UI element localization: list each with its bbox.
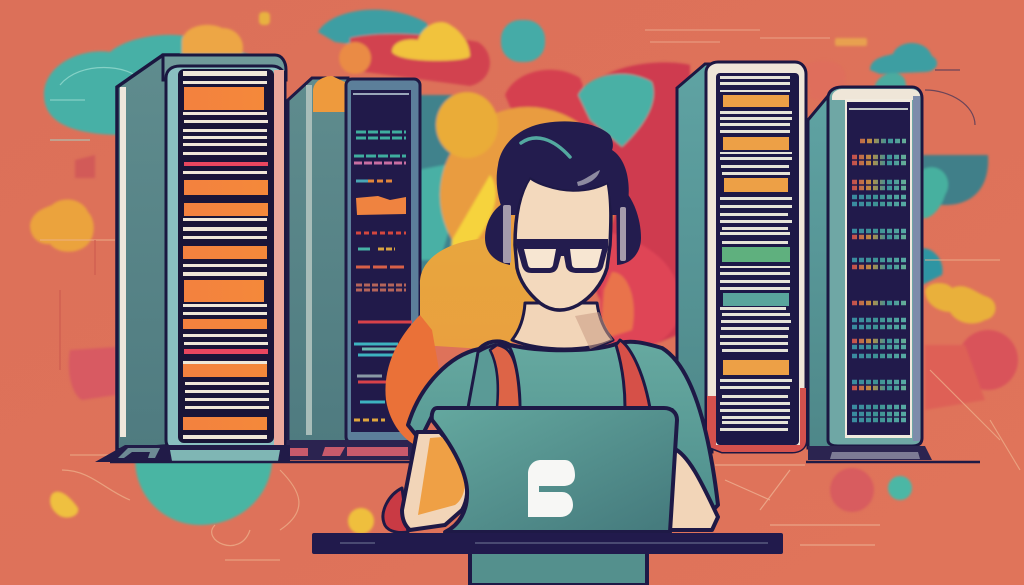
rack 2 status lines bbox=[354, 132, 412, 420]
headphone right pad bbox=[620, 207, 626, 261]
blob: teal wedge bbox=[418, 160, 470, 260]
neck shadow bbox=[575, 312, 613, 349]
rack 2 screen top line bbox=[353, 93, 409, 95]
server rack 2 (left inner) bbox=[285, 76, 420, 460]
rack 1 base highlight bbox=[170, 450, 280, 461]
rack 4 base highlight bbox=[830, 452, 920, 459]
gear: red right bbox=[958, 330, 1018, 390]
blob: yellow orange top left bbox=[182, 25, 243, 54]
blob: teal inside cup bbox=[922, 167, 948, 218]
rack 4 dark display bbox=[847, 102, 910, 435]
rack 4 cream top bbox=[832, 89, 920, 100]
rack 2 base bbox=[285, 440, 420, 460]
face bbox=[515, 177, 611, 310]
blob: amber lower left of head bbox=[420, 238, 540, 350]
blob: orange teardrop bbox=[385, 315, 440, 445]
blob: tag top right bbox=[835, 38, 867, 46]
rack 4 front frame bbox=[828, 87, 922, 446]
rack 1 orange drive bays bbox=[183, 87, 268, 430]
rack 1 white edge bbox=[120, 87, 126, 437]
drop: yellow bottom left bbox=[50, 492, 78, 518]
circle: red bottom right bbox=[830, 468, 874, 512]
left lens bbox=[524, 249, 556, 268]
rack 4 side panel bbox=[808, 96, 832, 448]
right lens bbox=[570, 249, 602, 268]
cloud: yellow bbox=[392, 22, 470, 61]
blob: teal under cloud bbox=[875, 73, 908, 95]
blob: red top middle bbox=[505, 70, 600, 130]
headphones right cup bbox=[616, 182, 641, 265]
rack 1 side panel bbox=[117, 55, 178, 450]
blob: orange behind head bbox=[440, 107, 616, 283]
circle: orange top bbox=[339, 42, 371, 74]
rack 4 right strip bbox=[913, 96, 920, 441]
hair bbox=[497, 121, 629, 215]
rack 4 screen top line bbox=[849, 108, 908, 110]
left strap outline bbox=[468, 345, 520, 408]
blob: pink rectangle left bbox=[69, 347, 116, 400]
cup: slate right bbox=[922, 155, 988, 205]
rack 2 front frame bbox=[346, 79, 420, 443]
rack 3 front frame bbox=[706, 62, 806, 452]
blob: red lower right bbox=[925, 345, 985, 410]
rack 1 cream stripes bbox=[183, 71, 269, 439]
rack 2 highlight bbox=[306, 85, 312, 435]
tee shirt bbox=[408, 341, 718, 515]
blob: orange near neck bbox=[600, 272, 634, 340]
rack 4 base bbox=[808, 446, 932, 460]
rack 1 front frame bbox=[166, 66, 285, 450]
left arm orange shade bbox=[418, 437, 465, 515]
blob: yellow streak bbox=[450, 175, 496, 268]
rack 1 inner panel bbox=[179, 70, 273, 442]
torso below desk bbox=[470, 550, 647, 585]
blob: red top centre bbox=[350, 34, 490, 86]
blob: red streak left bbox=[75, 155, 95, 178]
rack 2 base pads bbox=[290, 447, 408, 456]
blob: teal bottom left bbox=[135, 450, 272, 525]
cloud: large teal left bbox=[44, 35, 250, 135]
neck bbox=[512, 303, 613, 349]
blob: slate between racks bbox=[418, 95, 510, 275]
headphones left cup bbox=[485, 200, 510, 265]
rack 1 right pink stripe bbox=[274, 70, 284, 445]
rack 1 red stripes bbox=[184, 162, 268, 354]
rack 2 side panel bbox=[288, 78, 348, 442]
circle: yellow left of head bbox=[436, 92, 498, 158]
red cuff bbox=[383, 488, 408, 533]
laptop bbox=[432, 408, 677, 532]
hair highlight bbox=[521, 138, 570, 157]
blob: coral right of neck bbox=[600, 230, 680, 350]
rack 3 side panel bbox=[677, 64, 712, 452]
rack 1 base left foot bbox=[118, 448, 160, 458]
right backpack strap bbox=[616, 340, 650, 408]
drop: yellow near arm bbox=[348, 508, 374, 534]
glasses frame bbox=[515, 239, 608, 273]
left backpack strap bbox=[490, 345, 520, 408]
rack 3 orange bays bbox=[723, 95, 789, 375]
right arm bbox=[668, 448, 718, 530]
server rack 4 (right outer) bbox=[808, 87, 932, 460]
rack 3 teal bay bbox=[723, 293, 789, 306]
flower: yellow left bbox=[30, 200, 94, 252]
rack 4 screen bbox=[845, 99, 912, 438]
blob: teal top centre bbox=[318, 10, 429, 50]
rack 3 red lower corner bbox=[707, 388, 806, 452]
rack 2 orange top bbox=[313, 76, 345, 112]
rack 3 inner panel bbox=[716, 73, 799, 445]
desk highlight bbox=[340, 542, 768, 544]
hair grey highlight bbox=[577, 170, 600, 186]
blob: teal rounded bbox=[501, 20, 545, 62]
rack 3 cream stripes bbox=[720, 76, 792, 431]
blob: small yellow tag bbox=[259, 12, 270, 25]
headphone left pad bbox=[503, 205, 511, 263]
desk bbox=[312, 533, 783, 554]
rack 2 screen bbox=[351, 90, 411, 432]
blob: crimson right of head bbox=[590, 62, 690, 350]
left arm bbox=[402, 432, 467, 530]
blob: teal right bbox=[922, 248, 943, 285]
foreground overlays on rack 2 bbox=[385, 238, 540, 445]
rack 1 top cap bbox=[163, 55, 286, 80]
rack 4 led rows bbox=[852, 141, 906, 420]
blob: coral patch top right bbox=[805, 60, 846, 101]
cloud: teal top right bbox=[870, 43, 937, 74]
rack 3 green bay bbox=[722, 247, 790, 262]
server rack 3 (right inner) bbox=[677, 62, 806, 452]
laptop logo bbox=[528, 460, 575, 517]
flower: yellow right bbox=[925, 283, 996, 324]
circle: teal bottom right bbox=[888, 476, 912, 500]
person bbox=[312, 121, 783, 585]
server rack 1 (left outer) bbox=[95, 55, 290, 462]
rack 1 base bbox=[95, 445, 290, 462]
blob: teal centre right bbox=[578, 74, 654, 147]
floor line bbox=[110, 461, 980, 463]
rack 2 orange screen block bbox=[356, 196, 406, 215]
